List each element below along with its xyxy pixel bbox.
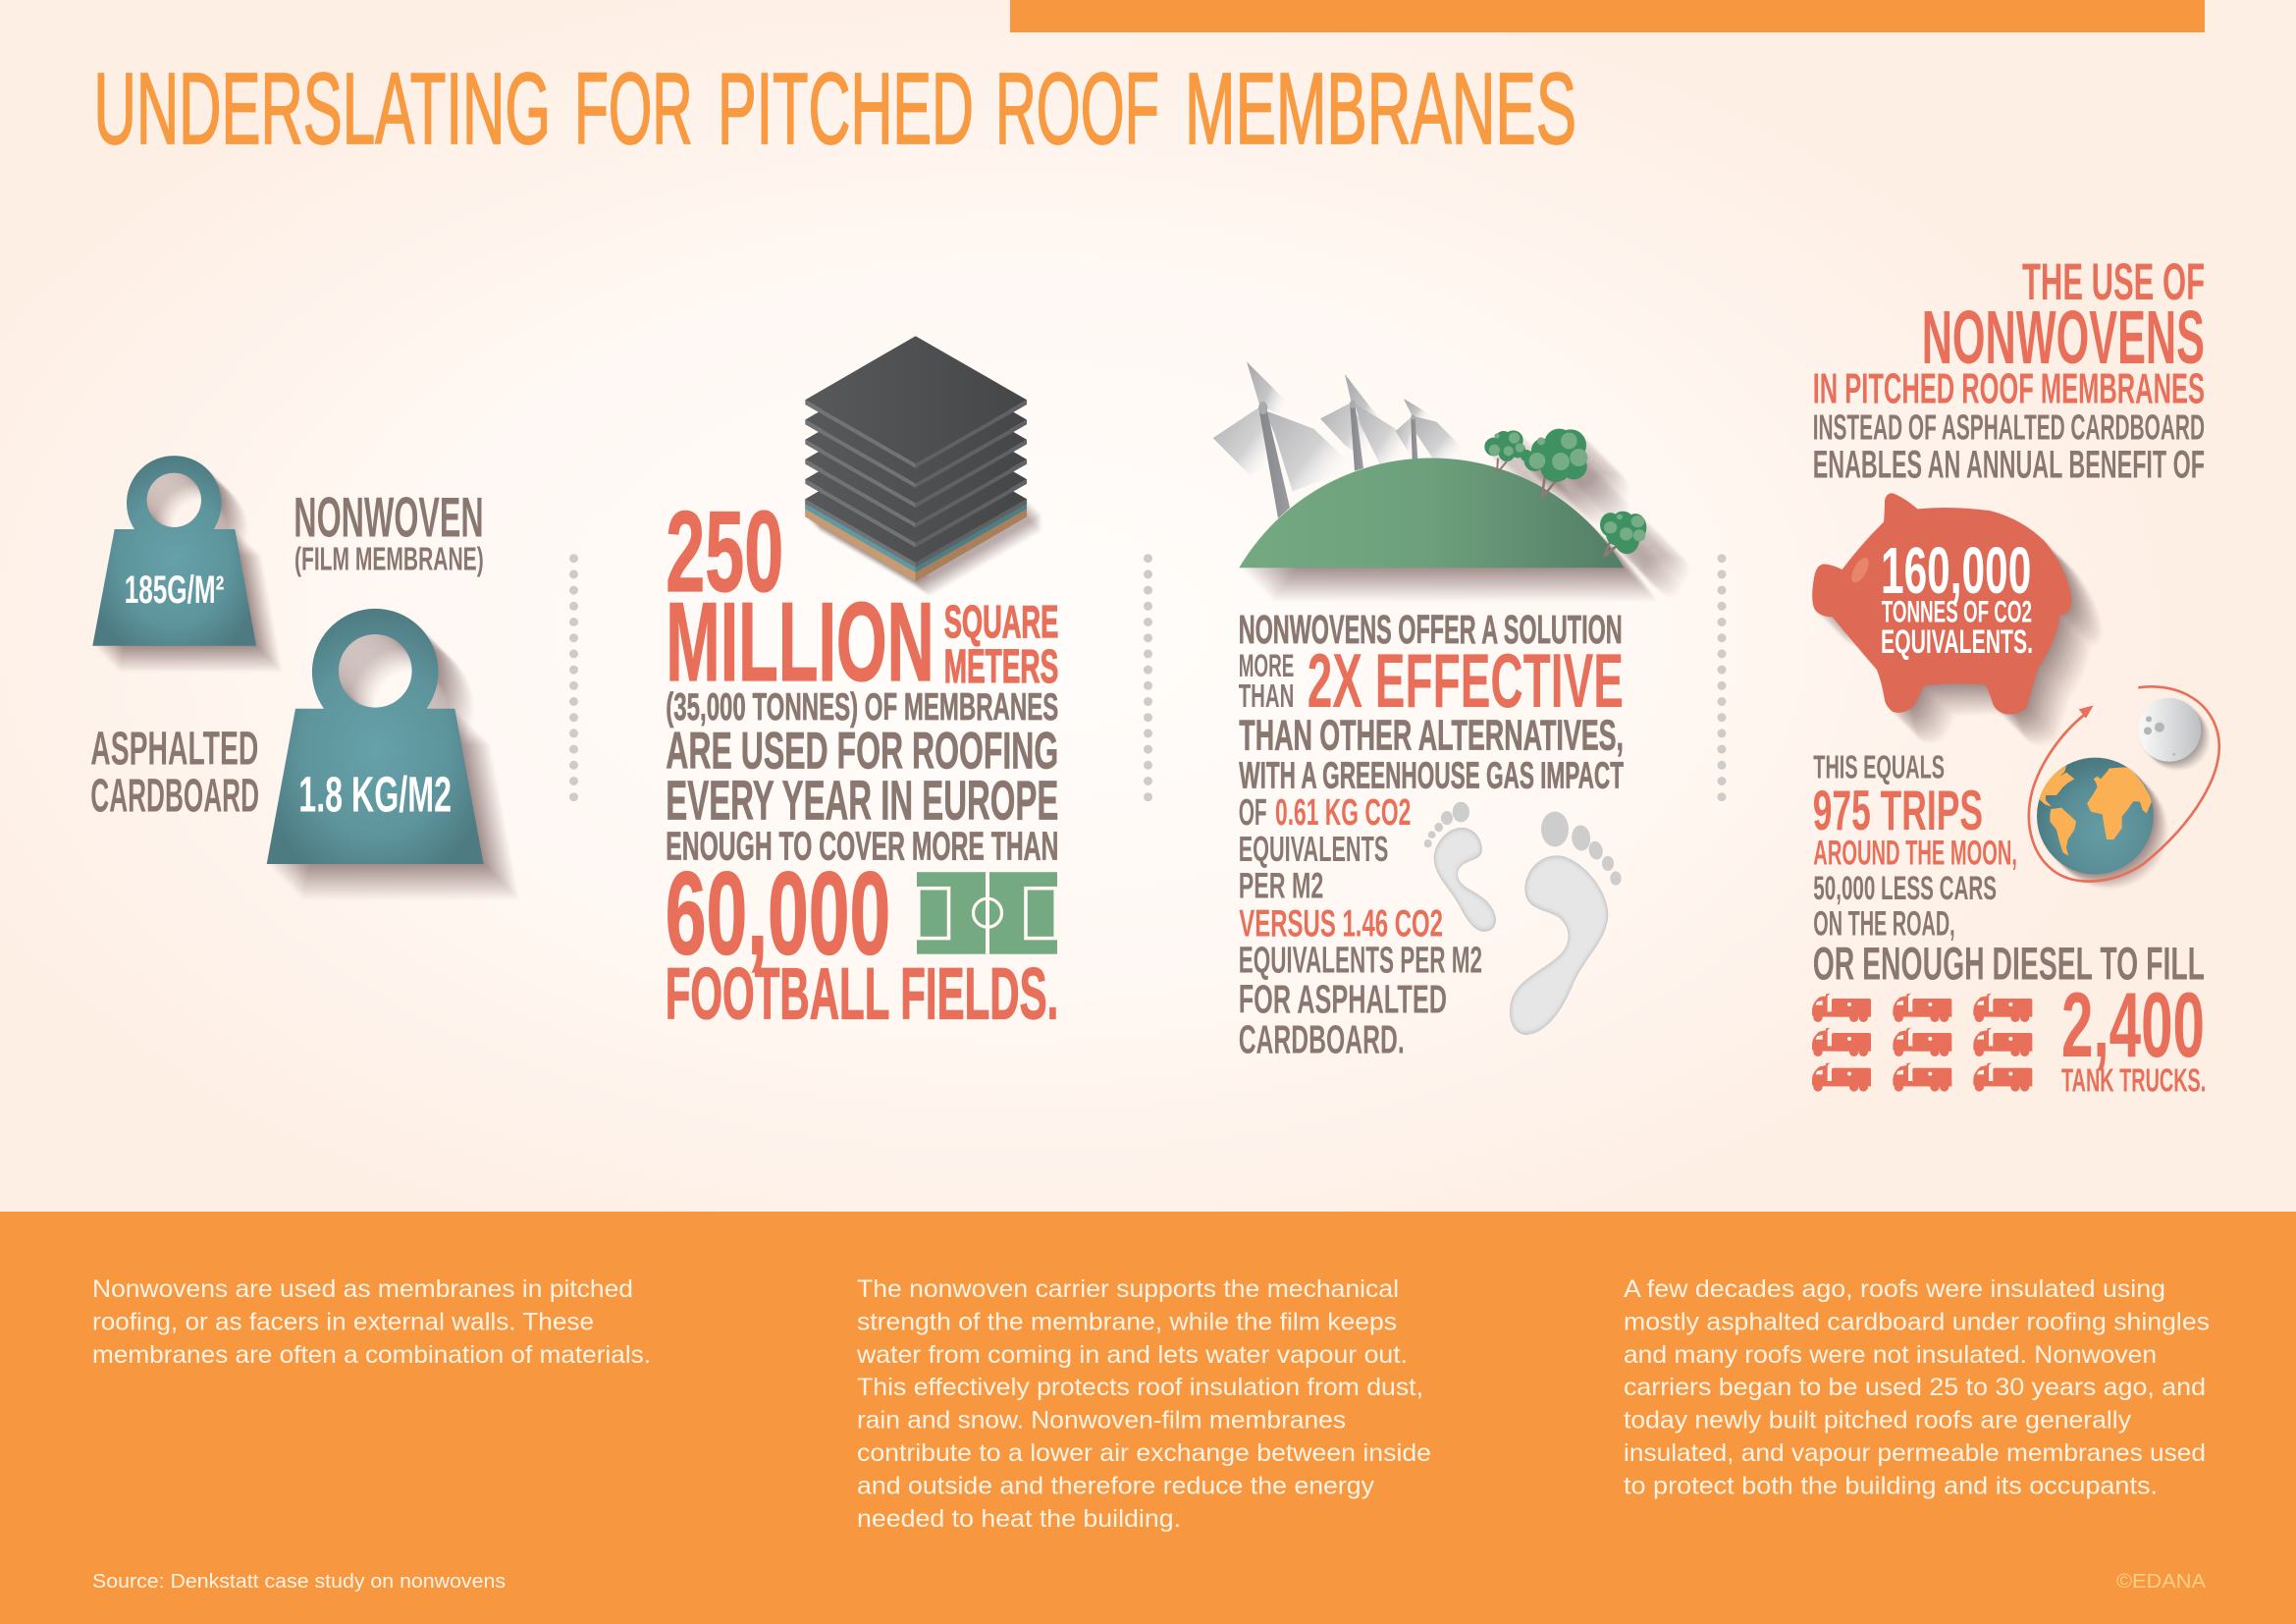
pig caption: 160,000 tonnes	[1881, 535, 2033, 661]
pig caption: 160,000 tonnes: 160,000	[1881, 535, 2031, 608]
body text: equivalents: AROUND THE MOON,	[1813, 835, 2017, 873]
label: asphalted cardboard: CARDBOARD	[90, 771, 259, 823]
title	[94, 52, 1576, 165]
title: ROOF	[995, 52, 1159, 165]
title: MEMBRANES	[1185, 52, 1576, 165]
icon: footprints	[1424, 802, 1622, 1035]
footer text column 1	[92, 1275, 651, 1369]
pig caption: 160,000 tonnes: TONNES OF CO2	[1882, 593, 2032, 628]
label: asphalted cardboard: ASPHALTED	[90, 723, 258, 775]
footer text column 1: membranes are often a combination of materials.	[92, 1341, 651, 1369]
divider 2	[1144, 559, 1152, 798]
headline: 250 million square meters	[666, 487, 1058, 705]
footer text column 2: The nonwoven carrier supports the mechanical	[857, 1275, 1399, 1303]
label: asphalted cardboard	[90, 723, 259, 823]
panel: greenhouse gas effectiveness	[1213, 361, 1646, 1061]
headline text: more than 2x effective: NONWOVENS OFFER A SOLUTION	[1239, 607, 1623, 652]
body text: CO2 comparison: OF	[1239, 791, 1267, 833]
label: nonwoven film membrane	[294, 487, 484, 577]
footer text column 2	[856, 1275, 1431, 1533]
footer text column 3: today newly built pitched roofs are generally	[1624, 1407, 2132, 1435]
label: 185g/m2: 185G/M²	[125, 568, 224, 612]
headline text: more than 2x effective: 2X EFFECTIVE	[1308, 639, 1624, 724]
copyright: ©EDANA	[2116, 1571, 2207, 1593]
panel: annual benefit	[1812, 253, 2219, 1099]
body text: roofing use: EVERY YEAR IN EUROPE	[666, 769, 1058, 831]
icon: earth	[2037, 758, 2154, 874]
footer text column 2: This effectively protects roof insulation from dust,	[857, 1374, 1423, 1401]
icon: piggy bank	[1812, 493, 2071, 714]
headline: 2,400 tank trucks	[2061, 973, 2206, 1099]
footer text column 2: and outside and therefore reduce the energy	[857, 1472, 1375, 1499]
headline text: more than 2x effective: WITH A GREENHOUSE GAS IMPACT	[1239, 756, 1624, 797]
footer text column 2: water from coming in and lets water vapour out.	[856, 1341, 1408, 1369]
footer text column 3: and many roofs were not insulated. Nonwoven	[1624, 1341, 2157, 1369]
icon: membrane layer stack	[805, 336, 1027, 581]
title: FOR	[574, 52, 693, 165]
body text: CO2 comparison: CARDBOARD.	[1239, 1016, 1405, 1061]
body text: roofing use: ENOUGH TO COVER MORE THAN	[666, 823, 1058, 868]
body text: equivalents: THIS EQUALS	[1813, 749, 1945, 785]
body text: equivalents: 50,000 LESS CARS	[1813, 870, 1997, 907]
headline: 60,000 football fields: FOOTBALL FIELDS.	[666, 952, 1058, 1034]
footer text column 3: mostly asphalted cardboard under roofing shingles	[1624, 1308, 2210, 1335]
panel: orange footer band	[0, 1212, 2296, 1624]
icon: trees	[1484, 429, 1646, 557]
headline: 60,000 football fields	[666, 847, 1058, 1034]
footer text column 1: roofing, or as facers in external walls. These	[92, 1308, 594, 1335]
footer text column 3	[1624, 1275, 2210, 1499]
body text: CO2 comparison: 0.61 KG CO2	[1275, 791, 1411, 833]
footer text column 2: needed to heat the building.	[857, 1505, 1181, 1533]
footer text column 2: rain and snow. Nonwoven-film membranes	[857, 1407, 1346, 1435]
pig caption: 160,000 tonnes: EQUIVALENTS.	[1881, 623, 2033, 661]
divider 3	[1718, 559, 1726, 798]
headline text: more than 2x effective	[1239, 607, 1624, 797]
title: UNDERSLATING	[94, 52, 551, 165]
body text: CO2 comparison	[1239, 791, 1482, 1061]
headline text: more than 2x effective: THAN OTHER ALTERNATIVES,	[1239, 711, 1624, 759]
footer text column 3: A few decades ago, roofs were insulated using	[1624, 1275, 2165, 1303]
headline: 250 million square meters: METERS	[944, 641, 1058, 693]
body text: CO2 comparison: VERSUS 1.46 CO2	[1239, 903, 1443, 945]
headline: 250 million square meters: SQUARE	[944, 596, 1058, 647]
footer text column 3: to protect both the building and its occupants.	[1624, 1472, 2158, 1499]
footer text column 3: insulated, and vapour permeable membranes used	[1624, 1439, 2206, 1467]
shadow of trees	[1484, 429, 1646, 554]
icon: tank trucks	[1812, 994, 2032, 1092]
icon: green hill	[1239, 458, 1624, 568]
label: nonwoven film membrane: (FILM MEMBRANE)	[294, 541, 484, 577]
top orange bar	[1010, 0, 2205, 32]
heading: the use of nonwovens	[1813, 253, 2205, 487]
body text: CO2 comparison: FOR ASPHALTED	[1239, 976, 1447, 1021]
headline: 2,400 tank trucks: TANK TRUCKS.	[2061, 1062, 2206, 1099]
body text: roofing use	[666, 686, 1058, 868]
panel: roofing volume	[666, 336, 1058, 1034]
label: nonwoven film membrane: NONWOVEN	[294, 487, 484, 550]
icon: moon	[2138, 698, 2201, 762]
icon: small weight	[92, 456, 256, 646]
label: 1.8 kg/m2: 1.8 KG/M2	[298, 767, 452, 823]
body text: roofing use: (35,000 TONNES) OF MEMBRANES	[666, 686, 1058, 729]
headline text: more than 2x effective: THAN	[1239, 677, 1294, 714]
footer text column 3: carriers began to be used 25 to 30 years ago, and	[1624, 1374, 2206, 1401]
body text: equivalents: ON THE ROAD,	[1813, 904, 1955, 943]
title: PITCHED	[718, 52, 974, 165]
headline: 60,000 football fields: 60,000	[666, 847, 890, 979]
icon: wind turbines	[1213, 361, 1472, 518]
divider 1	[569, 559, 578, 798]
headline text: more than 2x effective: MORE	[1239, 648, 1294, 683]
body text: CO2 comparison: EQUIVALENTS	[1239, 829, 1388, 869]
icon: orbit arrow	[2029, 686, 2219, 882]
body text: roofing use: ARE USED FOR ROOFING	[666, 723, 1058, 780]
headline: 250 million square meters: 250	[666, 487, 783, 616]
body text: equivalents: 975 TRIPS	[1813, 780, 1983, 842]
footer text column 2: contribute to a lower air exchange between inside	[857, 1439, 1431, 1467]
icon: large weight	[267, 609, 484, 864]
headline: 2,400 tank trucks: 2,400	[2061, 973, 2205, 1076]
footer text column 1: Nonwovens are used as membranes in pitched	[92, 1275, 633, 1303]
icon: football pitch	[917, 872, 1057, 954]
panel: weights comparison	[90, 456, 484, 864]
body text: CO2 comparison: PER M2	[1239, 865, 1323, 905]
headline: 250 million square meters: MILLION	[666, 579, 934, 705]
footer text column 2: strength of the membrane, while the film keeps	[857, 1308, 1397, 1335]
source note: Source: Denkstatt case study on nonwovens	[92, 1571, 506, 1593]
body text: CO2 comparison: EQUIVALENTS PER M2	[1239, 940, 1482, 981]
body text: equivalents	[1813, 749, 2205, 989]
